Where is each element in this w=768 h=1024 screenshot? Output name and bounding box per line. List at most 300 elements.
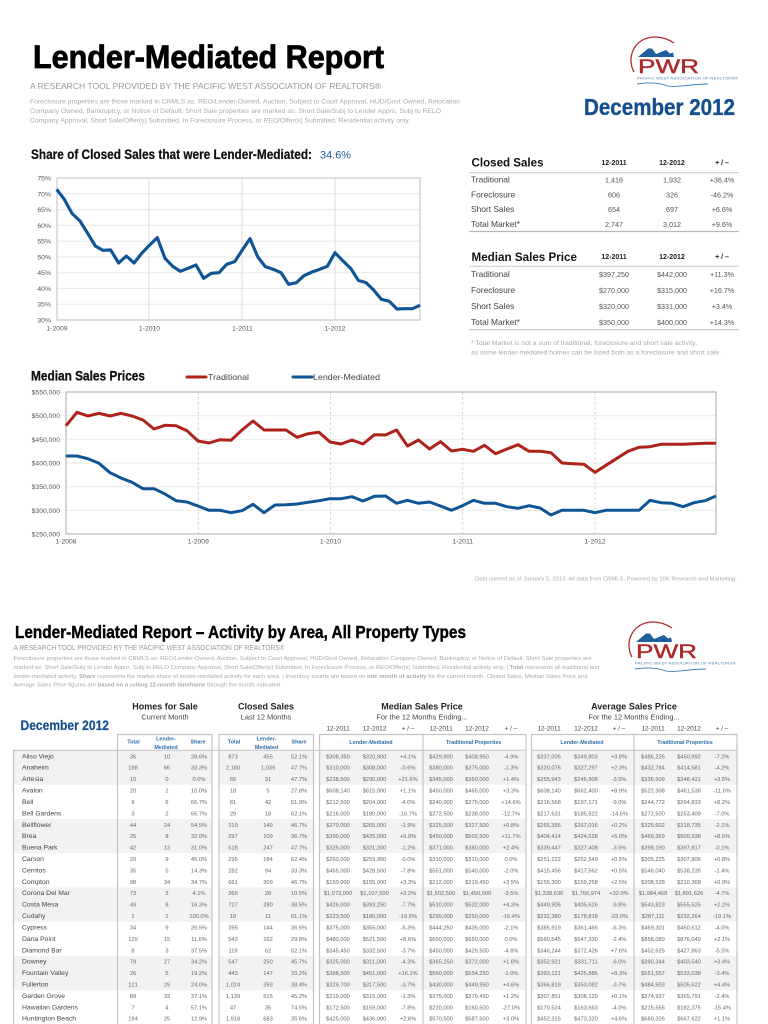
row: Cerritos: -7.8%: [401, 868, 415, 874]
row: Anaheim: -0.6%: [401, 766, 415, 772]
row: Cypress: 395: [228, 926, 238, 932]
row: Carson: 62.4%: [291, 857, 307, 863]
row: Avalon: 27.8%: [291, 788, 307, 794]
row: Cudahy: 100.0%: [189, 914, 209, 920]
panel: closed sales table: 12-2012: [659, 160, 685, 167]
row: Artesia: $255,943: [537, 777, 561, 783]
row: Brea: Brea: [22, 833, 37, 840]
table column labels: Traditional Properties: [446, 740, 501, 746]
row: Fullerton: Fullerton: [22, 982, 49, 988]
row: Huntington Beach: +3.0%: [503, 1017, 519, 1023]
row: Bell Gardens: 62.1%: [291, 811, 307, 817]
definitions text block: Company Approval, Short Sale/Offer(s) Submitted, In Foreclosure Process, or REO/Offer(s) Submitted. Residential activity only.: [30, 118, 410, 124]
row: Cerritos: 5: [165, 868, 169, 874]
row: Bell Gardens: -16.7%: [399, 811, 417, 817]
row: Dana Point: $858,089: [641, 937, 665, 943]
row: Aliso Viejo: $408,950: [465, 754, 489, 760]
row: Fullerton: $430,000: [429, 982, 453, 988]
row: Bell: 6: [165, 800, 169, 806]
row: Fountain Valley: 19.2%: [191, 971, 207, 977]
row: Compton: $208,528: [641, 880, 665, 886]
row: Corona Del Mar: 4.1%: [193, 891, 205, 897]
row: Compton: $210,368: [677, 880, 701, 886]
row: Cudahy: $299,000: [429, 914, 453, 920]
row: Hawaiian Gardens: $170,524: [537, 1005, 561, 1011]
row: Carson: +0.8%: [714, 857, 730, 863]
row: Cudahy: -19.1%: [713, 914, 731, 920]
row: Bellflower: 44: [130, 823, 136, 829]
row: Bell Gardens: $216,000: [326, 811, 350, 817]
row: Buena Park: $397,817: [677, 846, 701, 852]
row: Garden Grove: 33: [164, 994, 170, 1000]
row: Cerritos: -2.0%: [504, 868, 518, 874]
row: Anaheim: $432,784: [641, 766, 665, 772]
row: Avalon: $608,140: [537, 788, 561, 794]
row: Costa Mesa: 49: [130, 903, 136, 909]
row: Dana Point: +8.6%: [400, 937, 416, 943]
row: Bellflower: $265,000: [363, 823, 386, 829]
line chart: median sales prices: $300,000: [32, 508, 60, 515]
row: Diamond Bar: 62: [265, 948, 271, 954]
row: Huntington Beach: $570,500: [429, 1017, 453, 1023]
row: Corona Del Mar: $1,338,636: [535, 891, 563, 897]
row: Cudahy: 61.1%: [291, 914, 307, 920]
row: Corona Del Mar: [22, 890, 729, 897]
row: Downey: [22, 959, 730, 966]
row: Compton: 46.7%: [291, 880, 307, 886]
row: Buena Park: $339,447: [537, 846, 561, 852]
row: Fullerton: 121: [128, 982, 138, 988]
row: Costa Mesa: 727: [228, 903, 238, 909]
row: Bellflower: +0.8%: [503, 823, 519, 829]
row: Fountain Valley: $554,250: [465, 971, 489, 977]
row: Fountain Valley: -3.4%: [715, 971, 729, 977]
date column headings: 12-2012: [574, 726, 598, 732]
row: Huntington Beach: 194: [128, 1017, 138, 1023]
panel: median sales price table: $270,000: [599, 286, 629, 295]
row: Downey: $390,344: [641, 960, 665, 966]
row: Cypress: -2.1%: [504, 926, 518, 932]
row: Cypress: $450,612: [677, 926, 701, 932]
row: Carson: $310,000: [429, 857, 453, 863]
line chart: share of closed sales: 30%: [37, 318, 51, 324]
row: Hawaiian Gardens: $215,656: [641, 1005, 665, 1011]
row: Bell Gardens: $272,500: [641, 811, 665, 817]
row: Aliso Viejo: -7.2%: [715, 754, 729, 760]
row: Hawaiian Gardens: -27.0%: [502, 1005, 520, 1011]
panel: median sales price table: $320,000: [599, 302, 629, 311]
row: Garden Grove: [22, 993, 729, 1000]
row: Bell: 9: [131, 800, 135, 806]
row: Corona Del Mar: $1,502,500: [427, 891, 455, 897]
line chart: share of closed sales: 45%: [37, 270, 51, 277]
row: Downey: $403,540: [677, 960, 701, 966]
row: Compton: Compton: [22, 879, 50, 886]
panel: median sales price table: +14.3%: [710, 318, 735, 327]
row: Dana Point: $650,000: [429, 937, 453, 943]
row: Buena Park: $371,000: [429, 846, 453, 852]
line chart: median sales prices: 1-2009: [188, 538, 209, 546]
row: Compton: $155,300: [537, 880, 561, 886]
row: Artesia: $238,500: [326, 777, 350, 783]
row: Carson: $251,222: [537, 857, 561, 863]
row: Cypress: $355,000: [363, 926, 386, 932]
row: Artesia: [22, 776, 730, 783]
row: Bell Gardens: $253,409: [677, 811, 701, 817]
row: Cerritos: $540,000: [465, 868, 489, 874]
column group headings: [132, 701, 680, 722]
row: Compton: +3.5%: [503, 880, 519, 886]
row: Avalon: 2: [165, 788, 169, 794]
row: Anaheim: $380,000: [429, 766, 453, 772]
panel: median sales price table: $400,000: [657, 318, 687, 327]
row: Costa Mesa: $449,905: [537, 903, 561, 909]
row: Bellflower: [22, 822, 729, 829]
row: Bell Gardens: 18: [265, 811, 271, 817]
row: Cudahy: -16.4%: [502, 914, 520, 920]
row: Avalon: +1.1%: [400, 788, 416, 794]
row: Buena Park: -1.2%: [401, 846, 415, 852]
row: Hawaiian Gardens: 47: [230, 1005, 236, 1011]
row: Downey: $331,711: [574, 960, 598, 966]
row: Avalon: $461,538: [677, 788, 701, 794]
row: Huntington Beach: $587,500: [465, 1017, 489, 1023]
row: Dana Point: Dana Point: [22, 936, 56, 943]
line chart: share of closed sales: 1-2010: [139, 326, 160, 332]
row: Cypress: $361,466: [574, 926, 598, 932]
panel: median sales price table: Total Market*: [471, 317, 521, 327]
row: Fullerton: $505,622: [677, 982, 701, 988]
panel: median sales price table: $442,000: [657, 270, 687, 279]
row: Brea: $424,628: [574, 834, 598, 840]
row: Diamond Bar: $452,625: [641, 948, 665, 954]
definitions text block: Foreclosure properties are those marked in CRMLS as: REO/Lender-Owned, Auction, Subject to Court Approval, HUD/Govt Owned, Relocation: [30, 98, 460, 106]
line chart: median sales prices: 1-2012: [584, 538, 606, 546]
row: Brea: $502,500: [465, 834, 489, 840]
row: Garden Grove: 1,139: [226, 994, 240, 1000]
row: Cypress: $444,250: [429, 926, 453, 932]
row: Fullerton: $366,819: [537, 982, 561, 988]
row: Corona Del Mar: -4.7%: [715, 891, 729, 897]
row: Garden Grove: $308,129: [574, 994, 598, 1000]
row: Brea: 109: [263, 834, 273, 840]
row: Downey: 34.2%: [191, 960, 207, 966]
row: Hawaiian Gardens: 57.1%: [191, 1005, 207, 1011]
line chart: share of closed sales: 1-2011: [232, 326, 253, 332]
row: Anaheim: 33.3%: [191, 766, 207, 772]
row: Bell Gardens: [22, 810, 729, 817]
date column headings: 12-2011: [537, 726, 561, 732]
row: Bellflower: $270,000: [326, 823, 350, 829]
line chart: share of closed sales: 40%: [37, 286, 51, 293]
row: Bell Gardens: $238,000: [465, 811, 489, 817]
row: Artesia: 0: [165, 777, 169, 783]
row: Dana Point: +2.1%: [714, 937, 730, 943]
row: Buena Park: -0.1%: [715, 846, 729, 852]
row: Huntington Beach: $436,000: [363, 1017, 386, 1023]
row: Bell: $240,000: [429, 800, 453, 806]
row: Bellflower: 319: [228, 823, 238, 829]
row: Aliso Viejo: $450,992: [677, 754, 701, 760]
date column headings: 12-2012: [465, 726, 489, 732]
row: Carson: $252,549: [574, 857, 598, 863]
row: Fullerton: -3.7%: [401, 982, 415, 988]
row: Dana Point: [22, 936, 730, 943]
line chart: share of closed sales: 35%: [37, 302, 51, 309]
row: Artesia: $336,509: [641, 777, 665, 783]
row: Costa Mesa: -9.8%: [612, 903, 626, 909]
icon: PWR logo: PWR: [638, 57, 699, 78]
row: Buena Park: -3.5%: [612, 846, 626, 852]
legend: Traditional: [208, 372, 249, 382]
row: Bellflower: 24: [164, 823, 170, 829]
row: Buena Park: $380,000: [465, 846, 489, 852]
line chart: share of closed sales: 50%: [37, 254, 51, 261]
row: Avalon: $465,000: [465, 788, 489, 794]
row: Huntington Beach: [22, 1016, 730, 1023]
row: Brea: +9.0%: [400, 834, 416, 840]
row: Cudahy: $180,000: [363, 914, 386, 920]
row: Garden Grove: -2.4%: [715, 994, 729, 1000]
row: Bell: 66.7%: [191, 800, 207, 806]
column group headings: For the 12 Months Ending...: [588, 713, 680, 722]
table column labels: Mediated: [154, 745, 178, 751]
row: Hawaiian Gardens: $182,375: [677, 1005, 701, 1011]
row: Garden Grove: $319,000: [326, 994, 350, 1000]
row: Bellflower: 54.5%: [191, 823, 207, 829]
row: Cerritos: 14.3%: [191, 868, 207, 874]
row: Fullerton: $484,503: [641, 982, 665, 988]
row: Compton: $150,000: [326, 880, 350, 886]
panel: median sales price table: Foreclosure: [471, 285, 516, 295]
row: Bell: $216,568: [537, 800, 561, 806]
row: Anaheim: 198: [128, 766, 138, 772]
icon: PWR logo: [629, 622, 736, 672]
row: Bell: 42: [265, 800, 271, 806]
table column labels: Lender-: [257, 736, 277, 742]
row: Cerritos: $428,500: [363, 868, 386, 874]
row: Cypress: -5.3%: [401, 926, 415, 932]
column group headings: For the 12 Months Ending...: [376, 713, 468, 722]
legend: Lender-Mediated: [313, 372, 380, 382]
row: Buena Park: $327,408: [574, 846, 598, 852]
row: Corona Del Mar: +32.0%: [609, 891, 629, 897]
row: Anaheim: [22, 765, 729, 772]
row: Diamond Bar: $429,500: [465, 948, 489, 954]
row: Compton: [22, 879, 730, 886]
row: Compton: 98: [130, 880, 136, 886]
row: Compton: +2.5%: [611, 880, 627, 886]
table column labels: Mediated: [255, 745, 278, 751]
row: Diamond Bar: $346,244: [537, 948, 561, 954]
row: Carson: 295: [228, 857, 238, 863]
row: Carson: 9: [165, 857, 169, 863]
row: Costa Mesa: 38.5%: [291, 903, 307, 909]
row: Bellflower: $325,602: [641, 823, 665, 829]
row: Aliso Viejo: $486,226: [641, 754, 665, 760]
row: Corona Del Mar: +3.2%: [400, 891, 416, 897]
line chart: share of closed sales: 60%: [37, 223, 51, 230]
row: Huntington Beach: $660,326: [641, 1017, 665, 1023]
row: Huntington Beach: 25: [164, 1017, 170, 1023]
row: Carson: 184: [263, 857, 273, 863]
row: Brea: $390,000: [326, 834, 350, 840]
row: Bellflower: $318,735: [677, 823, 701, 829]
row: Costa Mesa: $543,823: [641, 903, 665, 909]
row: Huntington Beach: 12.9%: [191, 1017, 207, 1023]
row: Avalon: $662,400: [574, 788, 598, 794]
row: Corona Del Mar: 73: [130, 891, 136, 897]
row: Costa Mesa: $532,000: [465, 903, 489, 909]
row: Fountain Valley: 147: [263, 971, 273, 977]
row: Avalon: Avalon: [22, 788, 43, 794]
row: Dana Point: 11.6%: [191, 937, 207, 943]
row: Cerritos: $546,040: [641, 868, 665, 874]
row: Bell: -4.0%: [401, 800, 415, 806]
panel: closed sales table: 606: [608, 190, 620, 200]
row: Corona Del Mar: $1,984,468: [639, 891, 667, 897]
row: Buena Park: 42: [130, 846, 136, 852]
date column headings: 12-2011: [326, 726, 350, 732]
row: Cerritos: [22, 867, 729, 874]
row: Dana Point: 129: [128, 937, 138, 943]
row: Garden Grove: 37.1%: [191, 994, 207, 1000]
row: Fullerton: $449,950: [465, 982, 489, 988]
row: Aliso Viejo: $337,005: [537, 754, 561, 760]
row: Fountain Valley: +16.1%: [398, 971, 418, 977]
heading: share chart: Share of Closed Sales that were Lender-Mediated:: [31, 147, 312, 162]
row: Anaheim: $414,581: [677, 766, 701, 772]
row: Cypress: $375,000: [326, 926, 350, 932]
row: Artesia: 10: [130, 777, 136, 783]
row: Bell Gardens: Bell Gardens: [22, 810, 62, 817]
row: Garden Grove: Garden Grove: [22, 993, 65, 1000]
panel: closed sales table: 1,416: [605, 176, 623, 184]
icon: PWR logo: [631, 37, 738, 87]
row: Huntington Beach: 35.6%: [291, 1017, 307, 1023]
line chart: share of closed sales: 65%: [37, 207, 51, 214]
row: Dana Point: $547,330: [574, 937, 598, 943]
row: Cypress: 9: [165, 926, 169, 932]
date column headings: 12-2012: [677, 726, 701, 732]
row: Anaheim: 66: [164, 766, 170, 772]
row: Brea: +8.6%: [714, 834, 730, 840]
row: Fullerton: 393: [263, 982, 273, 988]
row: Fountain Valley: -1.0%: [504, 971, 518, 977]
date column headings: 12-2011: [641, 726, 665, 732]
table column labels: [127, 736, 713, 751]
line chart: median sales prices: [32, 390, 716, 546]
row: Cypress: 26.5%: [191, 926, 207, 932]
panel: median sales price table: 12-2011: [601, 254, 627, 261]
table column labels: Lender-: [156, 736, 176, 742]
row: Cypress: 144: [263, 926, 273, 932]
row: Anaheim: 47.7%: [291, 766, 307, 772]
column group headings: Current Month: [141, 713, 189, 722]
row: Fullerton: 38.4%: [291, 982, 307, 988]
row: Cudahy: $232,264: [677, 914, 701, 920]
row: Buena Park: Buena Park: [22, 845, 58, 852]
row: Artesia: 47.7%: [291, 777, 307, 783]
row: Cypress: -4.0%: [715, 926, 729, 932]
row: Carson: -0.0%: [401, 857, 415, 863]
row: Brea: +11.7%: [501, 834, 521, 840]
panel: median sales price table: + / –: [715, 254, 729, 261]
panel: closed sales table: Traditional: [471, 174, 510, 184]
row: Compton: $219,450: [465, 880, 489, 886]
panel: median sales price table: +11.3%: [710, 270, 735, 279]
line chart: median sales prices: 1-2010: [320, 538, 341, 546]
row: Aliso Viejo: $308,350: [326, 754, 350, 760]
row: Compton: +0.9%: [714, 880, 730, 886]
row: Carson: $260,000: [326, 857, 350, 863]
row: Garden Grove: $315,000: [363, 994, 386, 1000]
row: Downey: 79: [130, 960, 136, 966]
row: Bell Gardens: 2: [165, 811, 169, 817]
line chart: median sales prices: $550,000: [32, 390, 60, 396]
row: Fountain Valley: $560,000: [429, 971, 453, 977]
row: Fullerton: $329,700: [326, 982, 350, 988]
panel: closed sales table: 697: [666, 205, 678, 214]
row: Cudahy: $178,818: [574, 914, 598, 920]
data source note: Data current as of January 5, 2013. All data from CRMLS. Powered by 10K Research and Marketing.: [475, 576, 737, 582]
panel: closed sales table: 3,012: [663, 220, 681, 229]
row: Artesia: $290,000: [363, 777, 386, 783]
row: Huntington Beach: $425,000: [326, 1017, 350, 1023]
row: Cudahy: -19.5%: [399, 914, 417, 920]
row: Fountain Valley: $393,121: [537, 971, 561, 977]
panel: closed sales table: +9.6%: [712, 220, 733, 229]
line chart: median sales prices: $450,000: [32, 437, 60, 444]
row: Artesia: $348,421: [677, 777, 701, 783]
table stripes and panel frames: [14, 734, 737, 1024]
row: Hawaiian Gardens: $159,000: [363, 1005, 386, 1011]
row: Anaheim: -1.3%: [504, 766, 518, 772]
row: Brea: +5.0%: [611, 834, 627, 840]
row: Hawaiian Gardens: $172,500: [326, 1005, 350, 1011]
row: Cerritos: 94: [265, 868, 271, 874]
row: Huntington Beach: 1,918: [226, 1017, 240, 1023]
footnote: [471, 340, 721, 356]
row: Dana Point: 0.0%: [505, 937, 517, 943]
row: Avalon: $522,308: [641, 788, 665, 794]
row: Aliso Viejo: $349,803: [574, 754, 598, 760]
row: Bell Gardens: $180,000: [363, 811, 386, 817]
row: Downey: Downey: [22, 959, 47, 966]
row: Hawaiian Gardens: $163,663: [574, 1005, 598, 1011]
row: Bellflower: -1.9%: [401, 823, 415, 829]
report date: December 2012: [584, 94, 735, 120]
row: Anaheim: $308,000: [363, 766, 386, 772]
row: Fountain Valley: $388,500: [326, 971, 350, 977]
row: Bell: $275,000: [465, 800, 489, 806]
row: Aliso Viejo: 455: [263, 754, 273, 760]
row: Hawaiian Gardens: 74.5%: [291, 1005, 307, 1011]
row: Bell: [22, 799, 730, 806]
row: Bellflower: $327,500: [465, 823, 489, 829]
row: Artesia: $246,908: [574, 777, 598, 783]
line chart: median sales prices: $500,000: [32, 413, 60, 420]
row: Bellflower: -2.1%: [715, 823, 729, 829]
row: Aliso Viejo: [22, 753, 729, 760]
row: Bellflower: Bellflower: [22, 822, 52, 829]
row: Brea: $425,000: [363, 834, 386, 840]
row: Buena Park: +2.4%: [503, 846, 519, 852]
line chart: median sales prices: $350,000: [32, 484, 60, 491]
row: Cerritos: $415,456: [537, 868, 561, 874]
row: Hawaiian Gardens: Hawaiian Gardens: [22, 1004, 79, 1011]
row: Diamond Bar: Diamond Bar: [22, 947, 62, 954]
